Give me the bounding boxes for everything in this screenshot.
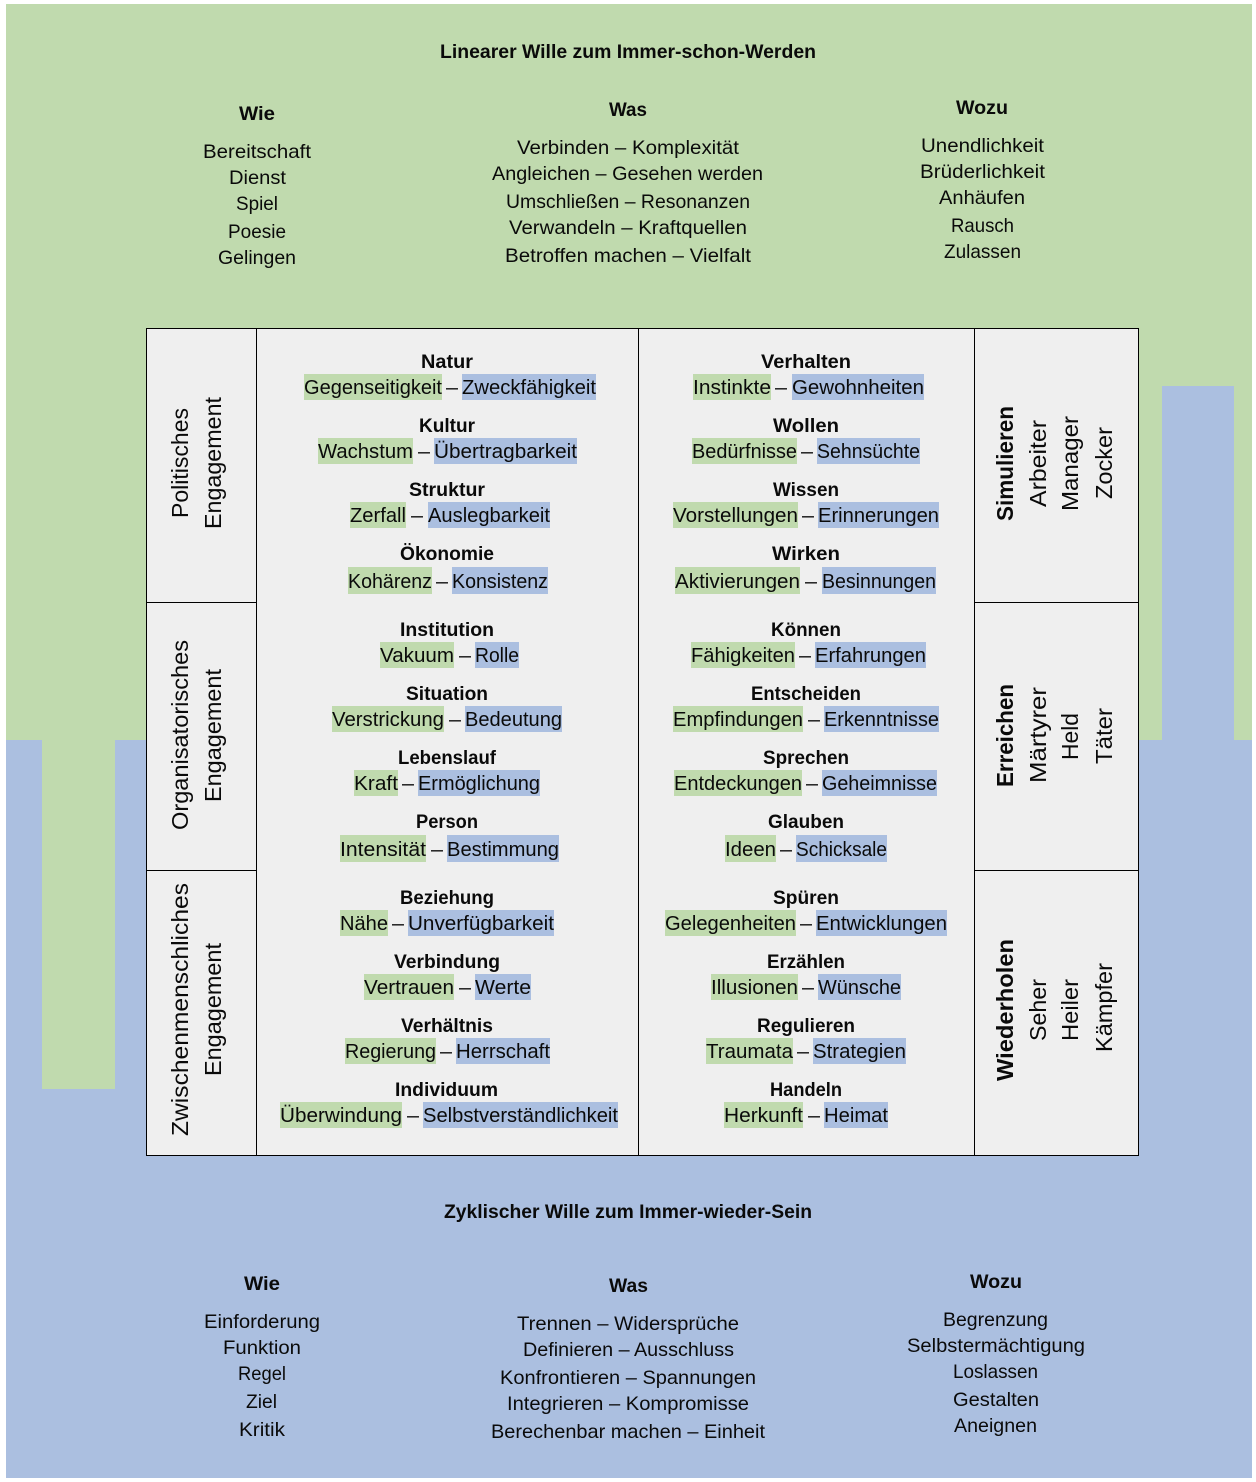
column: Wie (linear): Gelingen [218,247,296,269]
left column, group 1 [304,352,596,594]
left column, group 1: Auslegbarkeit [428,504,550,527]
column: Wozu (cyclic): Selbstermächtigung [907,1335,1085,1357]
column: Wie (cyclic): Wie [244,1274,280,1295]
column: Wozu (cyclic): Loslassen [953,1361,1038,1383]
column: Was (cyclic): Konfrontieren – Spannungen [500,1367,756,1389]
left column, group 3: Selbstverständlichkeit [423,1104,618,1127]
right column, group 3: – [800,912,813,935]
left column, group 3: Überwindung [280,1104,402,1127]
right label: Erreichen: Erreichen [992,684,1018,787]
right column, group 1: – [775,376,788,399]
right column, group 1: Wissen [773,480,839,501]
column: Wie (linear): Wie [239,104,275,125]
right column, group 2: Geheimnisse [822,772,937,795]
left column, group 3 [280,888,618,1128]
left label: Politisches Engagement: Engagement [200,396,226,529]
right column, group 1: – [802,504,815,527]
left column, group 3: Unverfügbarkeit [408,912,554,935]
left column, group 1: Ökonomie [400,544,494,565]
column: Was (cyclic): Berechenbar machen – Einheit [491,1421,766,1443]
column: Wie (cyclic): Ziel [246,1391,277,1413]
left column, group 2: Kraft [354,772,398,795]
right label: Wiederholen: Wiederholen [992,939,1018,1081]
column: Was (linear) [492,100,763,267]
column: Was (cyclic): Trennen – Widersprüche [517,1313,739,1335]
left column, group 1: Natur [421,352,474,373]
column: Was (cyclic): Definieren – Ausschluss [523,1339,734,1361]
left column, group 1: Übertragbarkeit [434,440,577,463]
left column, group 3: – [459,976,472,999]
right column, group 3: Spüren [773,888,839,909]
left column, group 1: Gegenseitigkeit [304,376,442,399]
right column, group 3: Traumata [706,1040,794,1063]
column: Wie (cyclic): Regel [238,1363,286,1385]
right label: Simulieren: Zocker [1091,427,1117,499]
right column, group 3: Herkunft [724,1104,803,1127]
left column, group 2: Rolle [475,644,519,667]
left column, group 3: Individuum [395,1080,498,1101]
right label: Erreichen: Täter [1091,708,1117,764]
right column, group 2: Fähigkeiten [691,644,795,667]
column: Wozu (cyclic): Wozu [970,1272,1022,1293]
right column, group 3: Erzählen [767,952,845,973]
right label: Wiederholen: Heiler [1057,979,1083,1041]
right label: Erreichen [992,684,1117,787]
left column, group 2: – [459,644,472,667]
right column, group 1 [673,352,939,594]
left column, group 1: Kultur [419,416,476,437]
right column, group 3: Regulieren [757,1016,855,1037]
left column, group 1: – [418,440,431,463]
column: Wie (linear): Spiel [236,193,278,215]
left column, group 2: Intensität [340,838,426,861]
left column, group 1: Zweckfähigkeit [462,376,596,399]
left column, group 3: Verhältnis [401,1016,493,1037]
column: Was (linear): Verwandeln – Kraftquellen [509,217,747,239]
column: Wie (linear): Dienst [229,167,287,189]
right column, group 3: Heimat [824,1104,888,1127]
column: Wozu (linear) [920,98,1046,263]
left column, group 2: Lebenslauf [398,748,497,769]
right column, group 2: – [780,838,793,861]
right column, group 3: Strategien [813,1040,906,1063]
left column, group 2: Situation [406,684,488,705]
left column, group 1: – [436,570,449,593]
right column, group 1: Verhalten [761,352,851,373]
column: Wozu (cyclic): Gestalten [953,1389,1039,1411]
background: green upper field with blue tower [6,4,1252,740]
left label: Zwischenmenschliches Engagement: Zwischenmenschliches [167,883,193,1136]
right column, group 1: Wirken [772,544,840,565]
right column, group 2: Schicksale [796,838,887,861]
right column, group 2: – [799,644,812,667]
right column, group 3: Entwicklungen [816,912,947,935]
column: Wozu (linear): Wozu [956,98,1008,119]
right column, group 1: Wollen [773,416,839,437]
title: linear will: Linearer Wille zum Immer-schon-Werden [440,42,816,63]
left column, group 1: Wachstum [318,440,413,463]
left column, group 2 [332,620,562,862]
right column, group 2: Sprechen [763,748,849,769]
left label: Organisatorisches Engagement: Organisatorisches [167,640,193,830]
right label: Wiederholen: Seher [1025,979,1051,1041]
right column, group 2: Können [771,620,841,641]
right column, group 2: Erkenntnisse [824,708,939,731]
left column, group 1: – [411,504,424,527]
left label: Politisches Engagement [167,396,226,529]
right label: Simulieren: Arbeiter [1025,420,1051,507]
column: Was (linear): Verbinden – Komplexität [517,137,740,159]
column: Wie (linear): Bereitschaft [203,141,312,163]
column: Was (linear): Angleichen – Gesehen werden [492,163,763,185]
left column, group 2: Vakuum [380,644,454,667]
left column, group 1: Struktur [409,480,486,501]
right column, group 3: Gelegenheiten [665,912,796,935]
left column, group 2: Verstrickung [332,708,444,731]
right column, group 1: Bedürfnisse [692,440,797,463]
column: Wie (linear): Poesie [228,221,286,243]
left column, group 1: – [446,376,459,399]
right column, group 3: Wünsche [818,976,901,999]
right column, group 1: – [805,570,818,593]
left label: Organisatorisches Engagement [167,640,226,830]
left column, group 1: Zerfall [350,504,406,527]
left column, group 3: Nähe [340,912,388,935]
right column, group 1: – [801,440,814,463]
left column, group 2: Ermöglichung [418,772,540,795]
table frame and grid [146,328,1138,1156]
right column, group 3: – [802,976,815,999]
column: Wozu (linear): Rausch [951,215,1014,237]
right label: Wiederholen: Kämpfer [1091,963,1117,1052]
right column, group 3: – [808,1104,821,1127]
left column, group 3: – [440,1040,453,1063]
left column, group 2: – [431,838,444,861]
left label: Politisches Engagement: Politisches [167,408,193,518]
right column, group 1: Vorstellungen [673,504,798,527]
left column, group 1: Kohärenz [348,570,432,593]
left label: Zwischenmenschliches Engagement: Engagement [200,942,226,1076]
left column, group 2: Bestimmung [447,838,559,861]
left label: Organisatorisches Engagement: Engagement [200,668,226,802]
right label: Simulieren [992,406,1117,521]
right column, group 3: Illusionen [711,976,798,999]
left column, group 3: – [407,1104,420,1127]
column: Wozu (linear): Zulassen [944,241,1021,263]
column: Was (cyclic) [491,1276,766,1443]
right column, group 3: – [797,1040,810,1063]
left column, group 3: Werte [475,976,531,999]
left column, group 3: Beziehung [400,888,494,909]
right column, group 3: Handeln [770,1080,842,1101]
column: Was (cyclic): Integrieren – Kompromisse [507,1393,749,1415]
left column, group 2: Person [416,812,478,833]
column: Wozu (linear): Brüderlichkeit [920,161,1046,183]
column: Was (linear): Was [609,100,647,121]
right column, group 1: Sehnsüchte [817,440,920,463]
right column, group 1: Gewohnheiten [792,376,924,399]
right column, group 2: – [808,708,821,731]
column: Wozu (linear): Anhäufen [939,187,1025,209]
left column, group 3: – [392,912,405,935]
right column, group 1: Erinnerungen [818,504,939,527]
column: Was (cyclic): Was [609,1276,648,1297]
background: blue lower field with green tower [6,740,1252,1478]
column: Was (linear): Betroffen machen – Vielfalt [505,245,752,267]
right column, group 1: Instinkte [693,376,771,399]
right column, group 2: Ideen [725,838,776,861]
left column, group 1: Konsistenz [452,570,548,593]
column: Wozu (cyclic): Begrenzung [943,1309,1048,1331]
column: Wie (cyclic) [204,1274,320,1441]
left label: Zwischenmenschliches Engagement [167,883,226,1136]
right column, group 2: – [806,772,819,795]
left column, group 3: Herrschaft [456,1040,550,1063]
right label: Wiederholen [992,939,1117,1081]
right column, group 2 [673,620,939,862]
right column, group 2: Glauben [768,812,844,833]
right column, group 2: Erfahrungen [815,644,926,667]
column: Wozu (cyclic) [907,1272,1085,1437]
right column, group 2: Empfindungen [673,708,803,731]
column: Wozu (cyclic): Aneignen [954,1415,1037,1437]
column: Wie (cyclic): Einforderung [204,1311,320,1333]
right label: Simulieren: Manager [1057,416,1083,511]
right label: Erreichen: Held [1057,713,1083,760]
left column, group 2: Bedeutung [465,708,562,731]
left column, group 2: – [449,708,462,731]
left column, group 2: Institution [400,620,494,641]
right column, group 1: Aktivierungen [675,570,800,593]
column: Wozu (linear): Unendlichkeit [921,135,1045,157]
left column, group 3: Regierung [345,1040,436,1063]
right label: Simulieren: Simulieren [992,406,1018,521]
left column, group 2: – [402,772,415,795]
column: Was (linear): Umschließen – Resonanzen [506,191,750,213]
column: Wie (cyclic): Kritik [239,1419,285,1441]
right label: Erreichen: Märtyrer [1025,687,1051,783]
column: Wie (linear) [203,104,312,269]
title: cyclic will: Zyklischer Wille zum Immer-wieder-Sein [444,1202,812,1223]
right column, group 2: Entscheiden [751,684,861,705]
column: Wie (cyclic): Funktion [223,1337,301,1359]
right column, group 1: Besinnungen [822,570,936,593]
left column, group 3: Vertrauen [364,976,454,999]
right column, group 3 [665,888,947,1128]
left column, group 3: Verbindung [394,952,500,973]
right column, group 2: Entdeckungen [674,772,802,795]
